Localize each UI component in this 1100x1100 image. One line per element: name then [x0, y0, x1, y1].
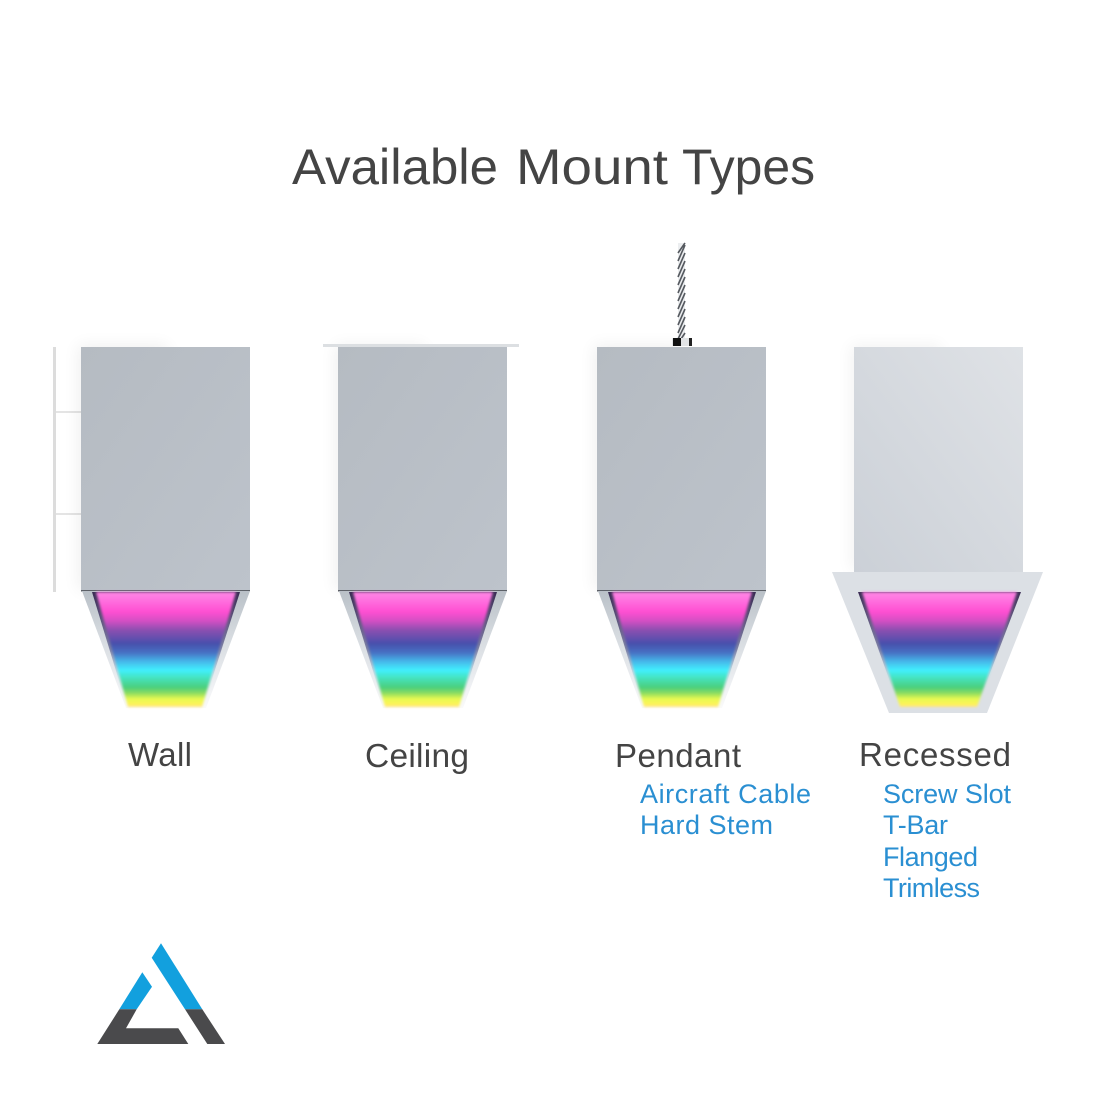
recessed options: Screw Slot [883, 779, 1011, 809]
housing sides [82, 591, 250, 708]
fixture: ceiling mount [323, 344, 519, 708]
pendant options: Aircraft Cable [640, 779, 811, 809]
title: Types [682, 139, 815, 195]
housing sides [598, 591, 766, 708]
aircraft cable [678, 243, 685, 339]
rainbow light [96, 592, 236, 707]
cable connector [672, 338, 692, 346]
fixture: wall mount [53, 345, 250, 708]
rainbow light [862, 592, 1017, 707]
recessed options: Flanged [883, 842, 978, 872]
housing sides [339, 591, 507, 708]
housing body [338, 347, 507, 591]
recessed options: T-Bar [883, 810, 948, 840]
logo [97, 943, 225, 1044]
housing body [854, 347, 1023, 573]
title: Mount [516, 139, 668, 195]
wall bracket [53, 347, 81, 592]
label: wall: Wall [128, 736, 192, 773]
rainbow light [612, 592, 752, 707]
housing body [597, 347, 766, 591]
fixture: pendant mount [594, 243, 766, 708]
recessed options [883, 779, 1011, 903]
trim flange [832, 572, 1043, 713]
pendant options: Hard Stem [640, 810, 773, 840]
label: recessed: Recessed [859, 736, 1011, 773]
housing body [81, 347, 250, 591]
ceiling plate [323, 344, 519, 347]
title: Available [292, 139, 498, 195]
label: ceiling: Ceiling [365, 738, 469, 775]
title [292, 139, 815, 195]
pendant options [640, 779, 811, 840]
recessed options: Trimless [883, 873, 980, 903]
label: pendant: Pendant [615, 737, 741, 774]
fixture: recessed mount [832, 345, 1043, 713]
rainbow light [353, 592, 493, 707]
